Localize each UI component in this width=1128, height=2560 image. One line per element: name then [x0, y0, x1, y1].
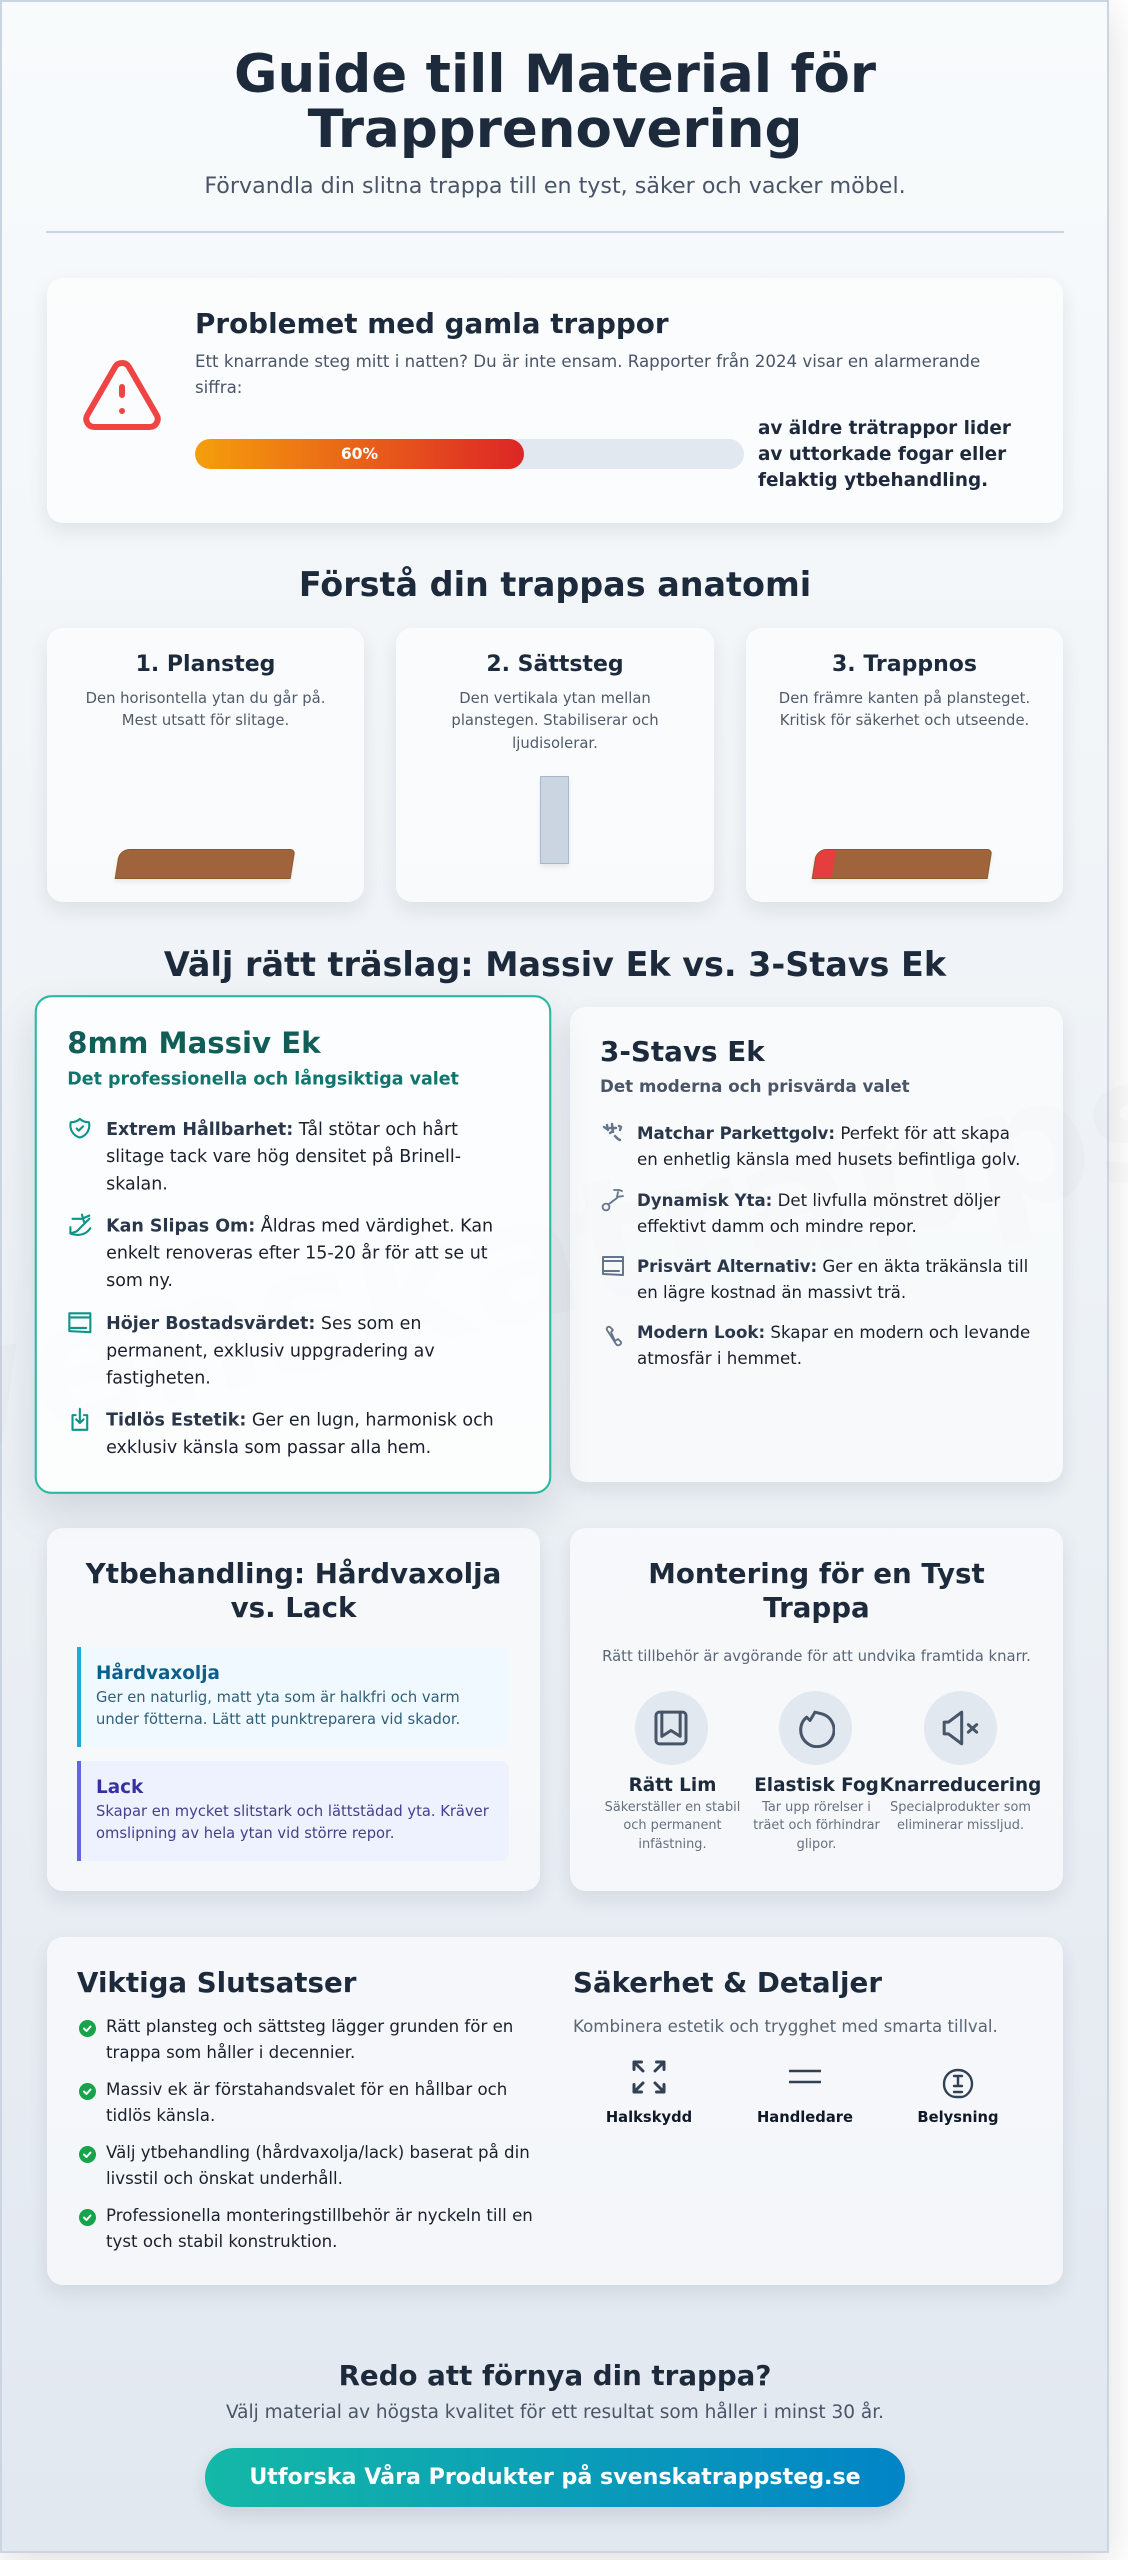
option heading: Lack [96, 1777, 143, 1798]
panel: surface treatment [47, 1528, 540, 1891]
conclusion text: tyst och stabil konstruktion. [106, 2232, 337, 2251]
card heading: 2. Sättsteg [486, 652, 624, 677]
item text: som ny. [106, 1270, 173, 1290]
item text: atmosfär i hemmet. [637, 1349, 802, 1368]
conclusion text: Professionella monteringstillbehör är nyckeln till en [106, 2206, 533, 2225]
feature label: Belysning [917, 2109, 999, 2126]
list item: dynamisk yta [602, 1189, 1000, 1236]
item text: Kan Slipas Om: Åldras med värdighet. Kan [106, 1216, 493, 1236]
heading: conclusions: Viktiga Slutsatser [77, 1966, 356, 1999]
safety intro: Kombinera estetik och trygghet med smarta tillval. [573, 2017, 998, 2036]
cta text: Välj material av högsta kvalitet för ett resultat som håller i minst 30 år. [226, 2402, 884, 2423]
panel: conclusions and safety [47, 1937, 1063, 2285]
statistic caption [758, 418, 1011, 491]
item text: skalan. [106, 1173, 168, 1193]
heading: safety: Säkerhet & Detaljer [573, 1966, 882, 1999]
panel: problem with old stairs [47, 278, 1063, 523]
card heading: 3-Stavs Ek [600, 1035, 765, 1068]
card text: planstegen. Stabiliserar och [451, 712, 659, 729]
item text: infästning. [638, 1837, 707, 1852]
item text: en lägre kostnad än massivt trä. [637, 1283, 906, 1302]
item text [637, 1323, 1030, 1368]
icon: green check [77, 2081, 97, 2101]
icon: green check [77, 2144, 97, 2164]
conclusion text [106, 2014, 513, 2066]
option: hårdvaxolja [77, 1647, 509, 1747]
item text: Säkerställer en stabil [605, 1800, 740, 1815]
conclusion text: livsstil och önskat underhåll. [106, 2169, 343, 2188]
icon: bookmark [635, 1691, 708, 1765]
item text: Modern Look: Skapar en modern och levande [637, 1323, 1030, 1342]
icon: expand arrows [631, 2059, 667, 2095]
icon: sanding [69, 1214, 92, 1236]
cta heading: Redo att förnya din trappa? [339, 2359, 771, 2392]
card heading: Trappa [763, 1591, 870, 1624]
icon: handrail lines [787, 2058, 823, 2094]
card heading: Ytbehandling: Hårdvaxolja [86, 1557, 501, 1590]
item text: slitage tack vare hög densitet på Brinell- [106, 1146, 461, 1166]
item text [106, 1313, 435, 1387]
card text: ljudisolerar. [512, 735, 598, 752]
item text: glipor. [797, 1837, 836, 1852]
item text: träet och förhindrar [753, 1818, 880, 1833]
card intro: Rätt tillbehör är avgörande för att undvika framtida knarr. [602, 1648, 1031, 1665]
nosing shape [812, 849, 992, 879]
conclusion text [106, 2140, 530, 2192]
icon: loop [606, 1326, 622, 1346]
problem text [195, 352, 980, 397]
title: Trapprenovering [308, 99, 802, 160]
card text: Den främre kanten på plansteget. [779, 690, 1030, 707]
feature: belysning [908, 2059, 1008, 2131]
option text: Skapar en mycket slitstark och lättstädad yta. Kräver [96, 1803, 489, 1820]
feature: halkskydd [599, 2059, 699, 2131]
item heading: Knarreducering [880, 1775, 1041, 1796]
conclusion 1 [77, 2014, 547, 2066]
item text [637, 1257, 1028, 1302]
item text [106, 1118, 461, 1193]
progress fill: 60% [341, 445, 378, 463]
panel: 8mm massiv ek [35, 995, 551, 1494]
problem text: siffra: [195, 378, 242, 397]
card text [86, 690, 325, 729]
item text: Dynamisk Yta: Det livfulla mönstret döljer [637, 1190, 1000, 1210]
icon: light [942, 2068, 974, 2100]
icon: screen [602, 1256, 624, 1276]
item text: enkelt renoveras efter 15-20 år för att se ut [106, 1243, 488, 1263]
title: Guide till Material för [234, 44, 876, 105]
panel: trappnos [746, 628, 1063, 902]
icon: shield check [69, 1118, 90, 1139]
title [234, 44, 876, 160]
problem text: Ett knarrande steg mitt i natten? Du är inte ensam. Rapporter från 2024 visar en alarmerande [195, 352, 980, 371]
item text: fastigheten. [106, 1367, 211, 1387]
feature label: Handledare [757, 2109, 853, 2126]
item text: Specialprodukter som [890, 1800, 1031, 1815]
conclusion text: Välj ytbehandling (hårdvaxolja/lack) baserat på din [106, 2143, 530, 2162]
conclusion 4 [77, 2203, 547, 2255]
item text [753, 1800, 880, 1852]
conclusion text [106, 2077, 507, 2129]
conclusion text: trappa som håller i decennier. [106, 2043, 355, 2062]
option text: Ger en naturlig, matt yta som är halkfri och varm [96, 1689, 460, 1706]
card heading: 8mm Massiv Ek [67, 1026, 321, 1060]
conclusion text: Rätt plansteg och sättsteg lägger grunden för en [106, 2017, 513, 2036]
card heading: 1. Plansteg [136, 652, 275, 677]
list item: prisvärt [602, 1256, 1028, 1302]
feature: handledare [755, 2059, 855, 2131]
list item: hållbarhet [69, 1118, 461, 1193]
option text: under fötterna. Lätt att punktreparera vid skador. [96, 1711, 460, 1728]
icon: muted speaker [924, 1691, 996, 1765]
option text: omslipning av hela ytan vid större repor. [96, 1825, 394, 1842]
item text: Höjer Bostadsvärdet: Ses som en [106, 1313, 421, 1333]
cta button: Utforska Våra Produkter på svenskatrappsteg.se [249, 2464, 861, 2490]
item text [858, 1799, 1063, 1836]
progress bar: 60% [195, 439, 744, 469]
item text [637, 1124, 1020, 1169]
item text: eliminerar missljud. [897, 1818, 1024, 1833]
item text: och permanent [623, 1818, 722, 1833]
card text [779, 690, 1030, 729]
panel: 3-stavs ek [570, 1007, 1063, 1482]
list item: estetik [71, 1408, 494, 1457]
column: safety [573, 1961, 1043, 2151]
icon: screen [68, 1312, 92, 1334]
card subheading: Det moderna och prisvärda valet [600, 1076, 910, 1096]
item text: Extrem Hållbarhet: Tål stötar och hårt [106, 1118, 458, 1138]
item text: permanent, exklusiv uppgradering av [106, 1340, 435, 1360]
option text [96, 1803, 489, 1842]
list item: slipas [69, 1214, 493, 1290]
card heading: 3. Trappnos [832, 652, 977, 677]
item text [637, 1190, 1000, 1236]
icon: green check [77, 2207, 97, 2227]
conclusion text: Massiv ek är förstahandsvalet för en hållbar och [106, 2080, 507, 2099]
cta button [205, 2448, 905, 2507]
icon: warning triangle [83, 360, 161, 430]
icon: parquet cluster [602, 1122, 622, 1142]
list item: modern look [606, 1323, 1030, 1368]
progress fill [195, 439, 524, 469]
header [46, 44, 1064, 233]
item text: en enhetlig känsla med husets befintliga golv. [637, 1150, 1020, 1169]
nose highlight [812, 849, 836, 879]
statistic caption: av uttorkade fogar eller [758, 444, 1006, 465]
item: rätt lim [605, 1691, 740, 1852]
header divider [46, 231, 1064, 233]
item: knarreducering [858, 1691, 1063, 1841]
item text: exklusiv känsla som passar alla hem. [106, 1437, 431, 1457]
list item: parkettgolv [602, 1122, 1020, 1169]
card heading: Montering för en Tyst [648, 1557, 985, 1590]
heading: problem: Problemet med gamla trappor [195, 307, 669, 340]
option: lack [77, 1761, 509, 1861]
card heading [85, 1557, 501, 1624]
item text [605, 1800, 740, 1852]
option text [96, 1689, 460, 1728]
card subheading: Det professionella och långsiktiga valet [67, 1069, 459, 1089]
statistic caption: av äldre trätrappor lider [758, 418, 1011, 439]
item text: Tar upp rörelser i [762, 1800, 871, 1815]
panel: mounting [570, 1528, 1063, 1891]
conclusion text: tidlös känsla. [106, 2106, 215, 2125]
heading: anatomy: Förstå din trappas anatomi [299, 565, 811, 604]
tread shape [115, 849, 295, 879]
card text: Kritisk för säkerhet och utseende. [780, 712, 1029, 729]
item text: Matchar Parkettgolv: Perfekt för att skapa [637, 1124, 1010, 1143]
icon: circle notch [779, 1691, 852, 1765]
icon: green check [77, 2018, 97, 2038]
icon: tool [602, 1189, 624, 1212]
item heading: Elastisk Fog [754, 1775, 879, 1796]
call to action [0, 2350, 1110, 2520]
list item: bostadsvärde [68, 1312, 435, 1387]
item text: Tidlös Estetik: Ger en lugn, harmonisk och [106, 1410, 494, 1430]
icon: tray arrow [71, 1408, 88, 1431]
panel: sättsteg [396, 628, 714, 902]
conclusion 2 [77, 2077, 547, 2129]
item text: effektivt damm och mindre repor. [637, 1216, 917, 1236]
item text [106, 1410, 494, 1457]
item text [106, 1214, 493, 1290]
panel: plansteg [47, 628, 364, 902]
card heading [648, 1557, 985, 1624]
card text: Den horisontella ytan du går på. [86, 690, 325, 707]
heading: wood types: Välj rätt träslag: Massiv Ek vs. 3-Stavs Ek [164, 945, 946, 984]
column: conclusions [77, 1961, 547, 2271]
card text: Mest utsatt för slitage. [122, 712, 289, 729]
item heading: Rätt Lim [629, 1775, 716, 1796]
item text: Prisvärt Alternativ: Ger en äkta träkänsla till [637, 1257, 1028, 1276]
card text [451, 690, 659, 752]
subtitle: Förvandla din slitna trappa till en tyst, säker och vacker möbel. [204, 173, 906, 199]
conclusion text [106, 2203, 533, 2255]
card heading: vs. Lack [231, 1591, 356, 1624]
item: elastisk fog [753, 1691, 880, 1852]
statistic caption: felaktig ytbehandling. [758, 470, 988, 491]
riser shape [540, 776, 569, 864]
conclusion 3 [77, 2140, 547, 2192]
option heading: Hårdvaxolja [96, 1663, 220, 1684]
card text: Den vertikala ytan mellan [459, 690, 651, 707]
feature label: Halkskydd [606, 2109, 692, 2126]
